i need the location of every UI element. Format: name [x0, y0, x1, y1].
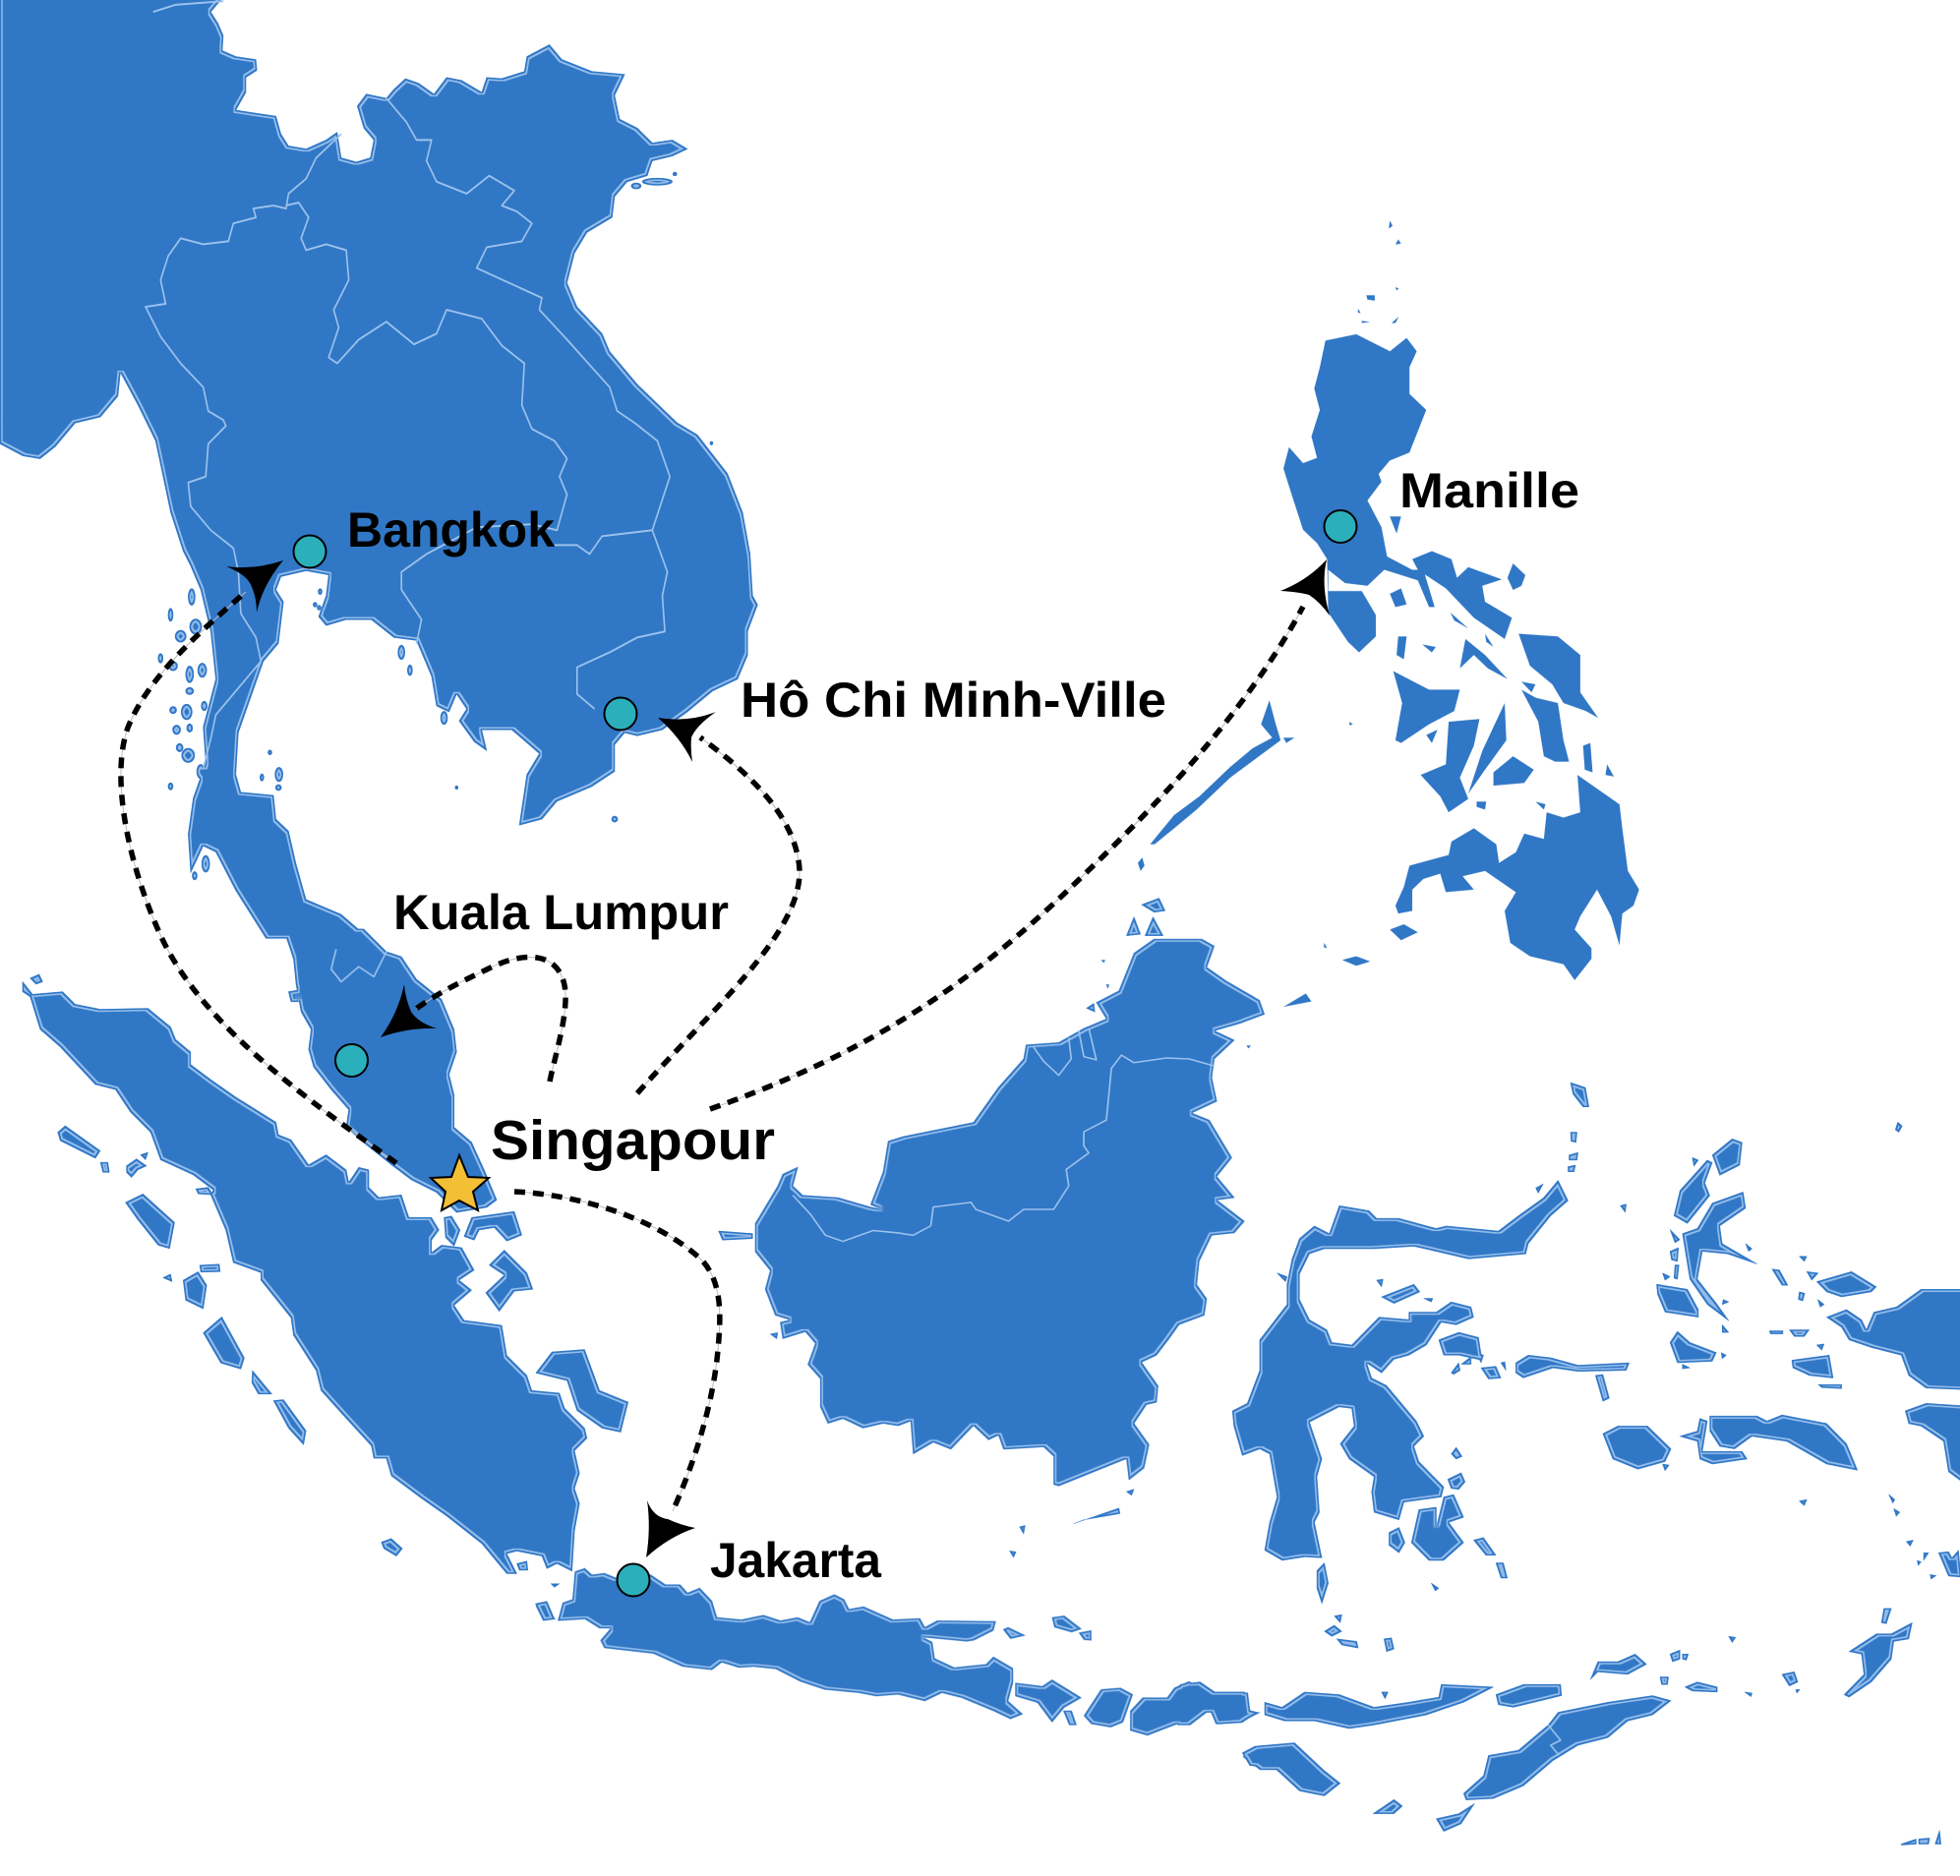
western New Guinea	[1826, 1289, 1960, 1483]
label: Jakarta: Jakarta	[710, 1533, 882, 1588]
Sulawesi	[1232, 1180, 1568, 1560]
country borders	[146, 1, 1561, 1755]
arrowhead: Bangkok	[226, 560, 283, 613]
city marker: Ho Chi Minh-Ville	[604, 698, 637, 730]
Mindanao	[1396, 775, 1639, 980]
route: Singapour to Jakarta	[514, 1192, 720, 1511]
arrowhead: Ho Chi Minh-Ville	[658, 712, 716, 762]
label: Hô Chi Minh-Ville: Hô Chi Minh-Ville	[741, 673, 1166, 728]
star marker: Singapour	[431, 1155, 489, 1210]
arrowhead: Manille	[1280, 559, 1330, 616]
Andaman coast islets	[158, 172, 713, 880]
route: Singapour to Kuala Lumpur	[416, 957, 565, 1082]
Malay peninsula and Sumatra region	[23, 929, 752, 1618]
Sulawesi, Moluccas, Lesser Sunda and Papua	[1177, 1083, 1960, 1846]
route: Singapour to Manille	[710, 607, 1303, 1109]
label: Singapour: Singapour	[491, 1109, 775, 1172]
city marker: Bangkok	[293, 535, 327, 568]
Palawan and Sulu islets	[1138, 700, 1418, 1007]
Lesser Sunda Islands	[1177, 1622, 1941, 1846]
Philippines	[1138, 220, 1639, 1007]
Batanes and Babuyan islets	[1358, 220, 1401, 322]
Java and Bali	[536, 1568, 1278, 1770]
Borneo	[755, 898, 1265, 1557]
Luzon	[1283, 334, 1435, 652]
label: Bangkok: Bangkok	[347, 502, 555, 557]
Sumatra	[23, 981, 587, 1574]
Banda and far-east islets	[1536, 1083, 1960, 1623]
city marker: Jakarta	[618, 1563, 649, 1597]
route: Singapour to Ho Chi Minh-Ville	[637, 737, 800, 1093]
mainland Southeast Asia	[0, 0, 757, 938]
Sulawesi satellite islands	[1277, 1273, 1508, 1652]
Moluccas	[1515, 1122, 1902, 1470]
Natuna island sliver	[719, 1231, 752, 1240]
arrowhead: Jakarta	[646, 1500, 695, 1557]
islands off Sumatra	[30, 974, 628, 1618]
city marker: Kuala Lumpur	[335, 1044, 368, 1077]
route: Singapour to Bangkok	[121, 592, 396, 1163]
label: Kuala Lumpur: Kuala Lumpur	[393, 885, 729, 940]
Visayas	[1390, 516, 1614, 812]
label: Manille: Manille	[1399, 463, 1579, 518]
arrowhead: Kuala Lumpur	[381, 984, 437, 1037]
city marker: Manille	[1324, 510, 1357, 543]
